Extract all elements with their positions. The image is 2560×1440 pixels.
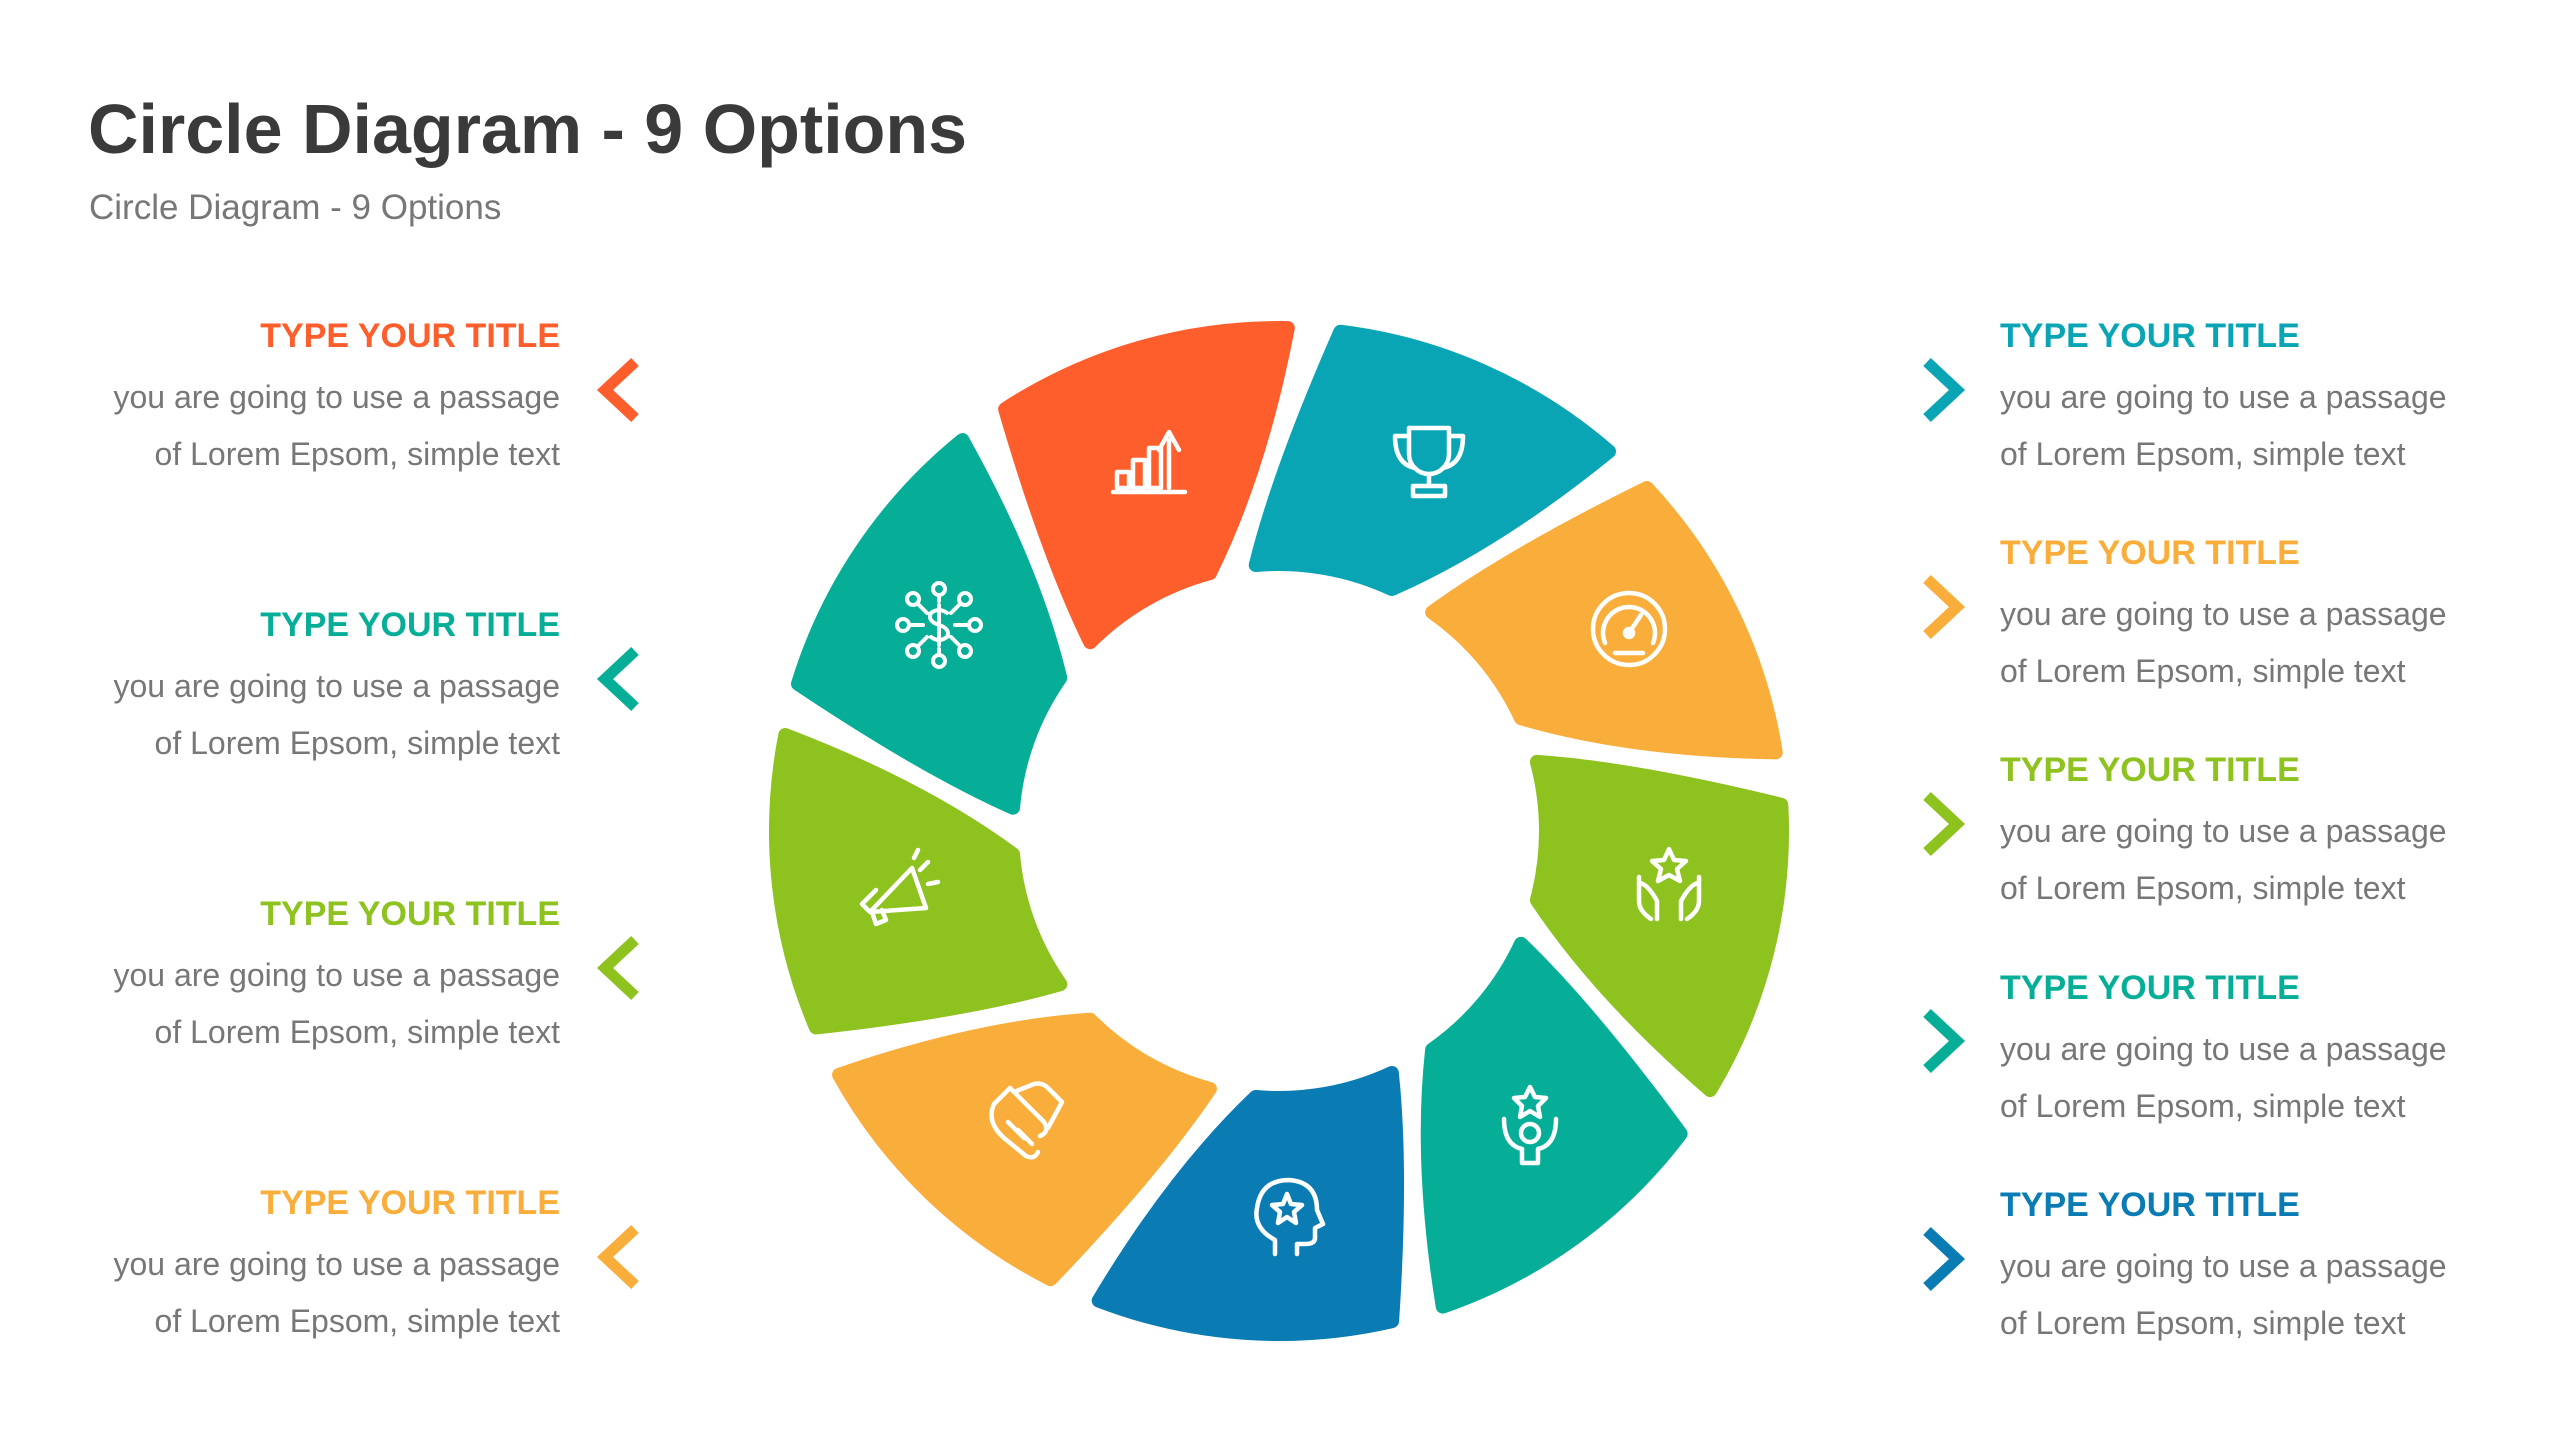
right text 3: TYPE YOUR TITLE <box>2000 751 2300 789</box>
right text 4: TYPE YOUR TITLE <box>2000 969 2300 1007</box>
icon: person with star <box>1504 1087 1556 1163</box>
left text 3 <box>113 895 560 1050</box>
left text 3: you are going to use a passage <box>113 957 560 993</box>
segment: teal <box>1191 270 1609 692</box>
segment: yellow handshake <box>839 918 1252 1320</box>
circle diagram <box>736 270 1852 1397</box>
arrow left 1 <box>605 362 635 418</box>
icon: trophy <box>1395 428 1463 496</box>
icon: growth chart <box>1113 432 1185 492</box>
left text 2: you are going to use a passage <box>113 668 560 704</box>
right text 3 <box>2000 751 2447 906</box>
right text 2: you are going to use a passage <box>2000 596 2447 632</box>
segment: blue head <box>1099 1005 1472 1397</box>
left text 4: TYPE YOUR TITLE <box>260 1184 560 1222</box>
right text 2: TYPE YOUR TITLE <box>2000 534 2300 572</box>
arrow left 2 <box>605 651 635 707</box>
icon: megaphone <box>862 850 938 924</box>
right text 3: of Lorem Epsom, simple text <box>2000 870 2405 906</box>
segment: green hands <box>1438 688 1852 1090</box>
arrow left 4 <box>605 1229 635 1285</box>
title: Circle Diagram - 9 Options <box>88 90 967 168</box>
right text 2 <box>2000 534 2447 689</box>
icon: gauge <box>1593 593 1665 665</box>
arrow right 4 <box>1927 1013 1957 1069</box>
left text 2: of Lorem Epsom, simple text <box>155 725 560 761</box>
arrow left 3 <box>605 940 635 996</box>
arrow right 5 <box>1927 1231 1957 1287</box>
right text 1: you are going to use a passage <box>2000 379 2447 415</box>
segment: green megaphone <box>736 735 1095 1068</box>
right text 1 <box>2000 317 2447 472</box>
left text 4: of Lorem Epsom, simple text <box>155 1303 560 1339</box>
right text 4: you are going to use a passage <box>2000 1031 2447 1067</box>
right text 1: TYPE YOUR TITLE <box>2000 317 2300 355</box>
right text 2: of Lorem Epsom, simple text <box>2000 653 2405 689</box>
right text 5 <box>2000 1186 2447 1341</box>
segment: teal-green dollar <box>746 440 1164 862</box>
right text 3: you are going to use a passage <box>2000 813 2447 849</box>
left text 1: of Lorem Epsom, simple text <box>155 436 560 472</box>
right text 1: of Lorem Epsom, simple text <box>2000 436 2405 472</box>
left text 2 <box>113 606 560 761</box>
segment: teal-green person <box>1335 915 1708 1307</box>
segment: yellow gauge <box>1417 474 1776 807</box>
arrow right 2 <box>1927 579 1957 635</box>
icon: dollar network <box>897 583 981 667</box>
segment: orange-red <box>1005 328 1288 642</box>
left text 1: you are going to use a passage <box>113 379 560 415</box>
left text 3: TYPE YOUR TITLE <box>260 895 560 933</box>
icon: hands with star <box>1639 849 1699 919</box>
right text 4 <box>2000 969 2447 1124</box>
left text 1 <box>113 317 560 472</box>
left text 2: TYPE YOUR TITLE <box>260 606 560 644</box>
right text 5: TYPE YOUR TITLE <box>2000 1186 2300 1224</box>
icon: head with star <box>1256 1180 1323 1254</box>
right text 5: of Lorem Epsom, simple text <box>2000 1305 2405 1341</box>
subtitle: Circle Diagram - 9 Options <box>89 188 501 227</box>
arrow right 1 <box>1927 362 1957 418</box>
left text 1: TYPE YOUR TITLE <box>260 317 560 355</box>
left text 4: you are going to use a passage <box>113 1246 560 1282</box>
right text 5: you are going to use a passage <box>2000 1248 2447 1284</box>
right text 4: of Lorem Epsom, simple text <box>2000 1088 2405 1124</box>
arrow right 3 <box>1927 796 1957 852</box>
icon: handshake <box>992 1084 1062 1157</box>
left text 3: of Lorem Epsom, simple text <box>155 1014 560 1050</box>
left text 4 <box>113 1184 560 1339</box>
